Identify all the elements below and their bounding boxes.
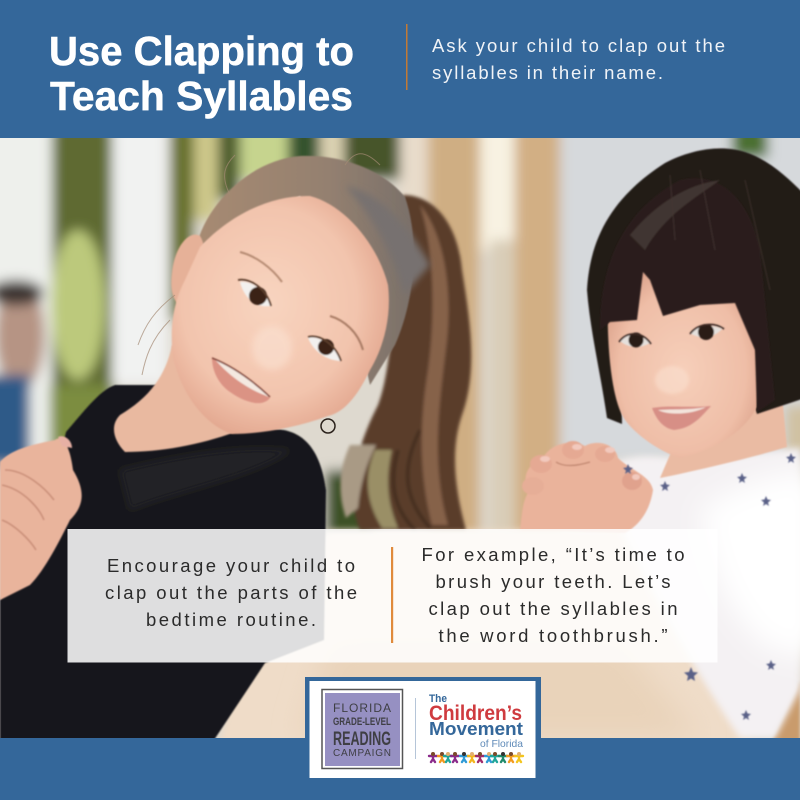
logo divider	[415, 698, 416, 759]
left girl: grey hair streak	[345, 186, 430, 295]
header divider	[406, 24, 408, 90]
left girl: hair	[196, 156, 414, 385]
header band	[0, 0, 800, 138]
logo panel	[305, 677, 541, 780]
left girl: ponytail	[340, 195, 471, 530]
panel text: left	[105, 555, 357, 630]
logo: Florida Grade-Level Reading Campaign: READING	[333, 728, 391, 750]
logo: Florida Grade-Level Reading Campaign: GRADE-LEVEL	[333, 716, 391, 728]
panel text: right	[422, 544, 684, 646]
logo: The Children's Movement of Florida: The	[429, 693, 447, 705]
panel text: right: clap out the syllables in	[428, 598, 678, 619]
blurred background	[0, 120, 800, 760]
title: Teach Syllables	[50, 73, 353, 119]
logo: Florida Grade-Level Reading Campaign: CAMPAIGN	[333, 748, 391, 759]
logo: The Children's Movement of Florida: Children’s	[429, 702, 522, 725]
right girl: neck	[660, 405, 787, 478]
panel text: right: the word toothbrush.”	[438, 625, 668, 646]
left girl: black sweater	[0, 385, 326, 740]
left girl: clasped hands	[0, 436, 82, 600]
panel text: right: For example, “It’s time to	[422, 544, 684, 565]
logo: Florida Grade-Level Reading Campaign: FLORIDA	[333, 701, 391, 715]
right girl: shirt stars	[623, 453, 796, 720]
left girl: hair wisps	[138, 154, 380, 375]
right girl: clasped hands	[520, 441, 653, 533]
right girl: white shirt	[617, 448, 800, 738]
title: Use Clapping to	[49, 28, 354, 74]
right girl: hair back	[587, 148, 800, 424]
logo: Florida Grade-Level Reading Campaign	[322, 690, 402, 768]
footer band	[0, 738, 800, 800]
panel text: left: bedtime routine.	[146, 609, 316, 630]
foreground blurred cream arm	[221, 524, 743, 738]
logo: The Children's Movement of Florida: Movement	[429, 719, 523, 739]
panel text: right: brush your teeth. Let’s	[436, 571, 670, 592]
panel text: left: Encourage your child to	[107, 555, 355, 576]
logo: row of paper-doll children	[429, 752, 523, 762]
left girl: earring	[321, 419, 335, 433]
left girl: face	[172, 196, 389, 434]
panel divider	[391, 547, 393, 643]
left girl: eyes, brows, nose, mouth	[212, 252, 363, 403]
right girl: fringe	[600, 170, 775, 412]
left girl: ear	[171, 235, 205, 308]
intro text: syllables in their name.	[432, 62, 663, 83]
right girl: eyes, nose, mouth	[619, 324, 724, 430]
translucent text panel	[68, 529, 718, 662]
intro text: Ask your child to clap out the	[432, 35, 725, 56]
logo: The Children's Movement of Florida	[429, 693, 523, 750]
right girl: face	[608, 264, 758, 458]
title	[49, 28, 354, 119]
panel text: left: clap out the parts of the	[105, 582, 357, 603]
photo: two children clasping hands	[0, 120, 800, 760]
logo: The Children's Movement of Florida: of Florida	[480, 738, 523, 750]
left girl: neck	[113, 346, 233, 453]
intro text	[432, 35, 725, 83]
